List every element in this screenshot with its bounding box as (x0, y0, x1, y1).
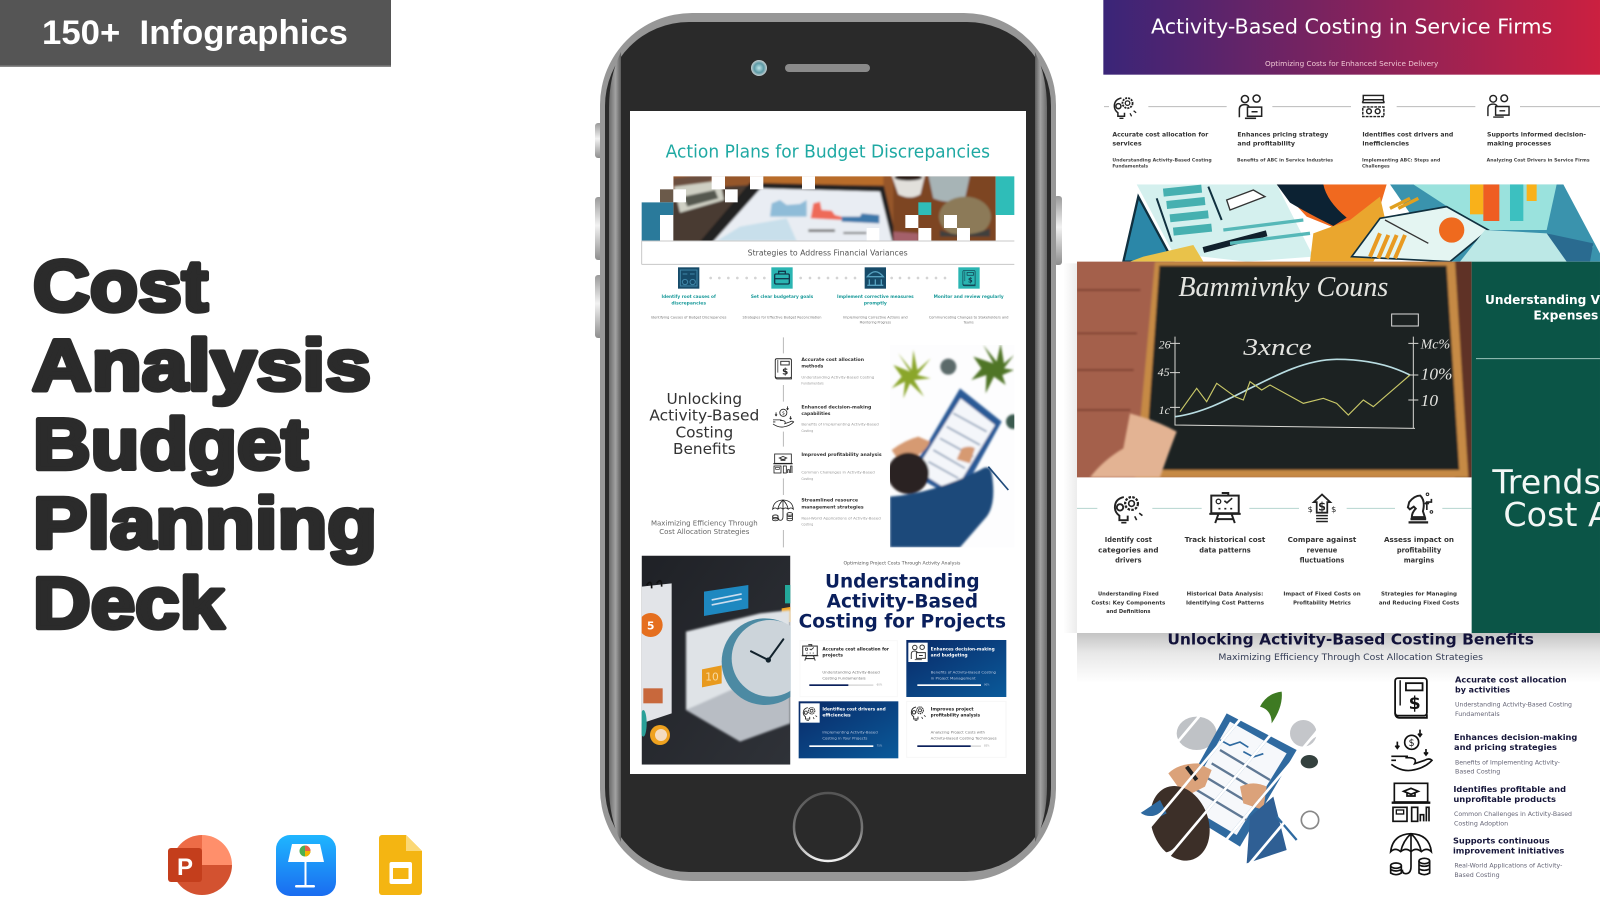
item 4: Analyzing Cost Drivers in Service Firms (1487, 157, 1590, 163)
heading: Unlocking Activity-Based Costing Benefits: Costing (675, 424, 733, 442)
slide: Activity-Based Costing in Service Firms (1103, 0, 1600, 262)
man (888, 453, 993, 547)
heading: Unlocking Activity-Based Costing Benefits: Activity-Based (649, 407, 759, 425)
benefit 3: Improved profitability analysis (801, 452, 882, 458)
card: Enhances decision-making: in Project Management (931, 676, 976, 680)
camera (751, 60, 767, 76)
header band (1103, 0, 1600, 75)
subtitle strip (642, 241, 1014, 264)
orange tag and coin (650, 665, 722, 745)
chalk writing: 45 (1158, 365, 1170, 379)
chalk writing: Mc% (1420, 337, 1450, 352)
column: compare against revenue: Impact of Fixed Costs on (1283, 592, 1361, 598)
photo: man reviewing clipboard with plants (888, 343, 1021, 547)
benefit 2: Costing (801, 429, 813, 433)
item 1 (1112, 98, 1212, 170)
icon: Google Slides (379, 835, 422, 895)
title: Cost Analysis Budget Planning Deck: Analysis (32, 326, 371, 406)
slide title: Action Plans: Action Plans for Budget Discrepancies (666, 141, 990, 162)
heading: Understanding Activity-Based Costing for Projects: Understanding (825, 571, 980, 592)
illustration: colourful finance desk (1123, 184, 1600, 262)
timeline of four steps (651, 267, 1008, 325)
step 1 (651, 267, 727, 319)
benefit: continuous improvement (1391, 834, 1565, 879)
icon: PowerPoint: P (177, 854, 193, 881)
phone mockup (595, 13, 1062, 881)
phone side buttons (595, 123, 1062, 338)
card: Enhances decision-making: Benefits of Activity-Based Costing (931, 670, 996, 674)
step 3: Monitoring Progress (860, 321, 891, 325)
benefit 4: Real-World Applications of Activity-Based (801, 516, 881, 520)
benefit: identifies profitable products: Costing Adoption (1454, 820, 1508, 827)
benefit: continuous improvement: Supports continuous (1453, 837, 1550, 846)
chalk writing: 26 (1159, 338, 1171, 352)
column: compare against revenue: revenue (1307, 546, 1338, 554)
slide: Unlocking Activity-Based Costing Benefits: Maximizing Efficiency Through Cost Allocation Strategies (1218, 653, 1483, 663)
card: Identifies cost drivers (799, 701, 898, 758)
card: Identifies cost drivers: Identifies cost drivers and (822, 707, 886, 713)
item 1: Fundamentals (1112, 164, 1148, 170)
message tag (704, 585, 792, 623)
diagonal striped photo: hands on clipboard (1140, 713, 1320, 864)
card: Identifies cost drivers: efficiencies (822, 713, 851, 719)
benefit: continuous improvement: Real-World Applications of Activity- (1454, 863, 1562, 870)
benefit: identifies profitable products: Common Challenges in Activity-Based (1454, 811, 1572, 818)
benefit: accurate cost allocation: Accurate cost allocation (1455, 675, 1567, 684)
card: Accurate cost allocation: Costing Fundamentals (822, 676, 866, 680)
card: Accurate cost allocation: Accurate cost allocation for (822, 646, 890, 652)
column: assess impact on margins: Assess impact on (1384, 536, 1454, 544)
green side panel: Understanding V (1485, 293, 1600, 307)
benefit 4: Streamlined resource (801, 498, 858, 504)
item 2 (1237, 95, 1333, 163)
subheading: Maximizing Efficiency: Maximizing Efficiency Through (651, 520, 758, 528)
chalk writing: Bammivnky Couns (1178, 272, 1388, 303)
phone body (600, 13, 1056, 881)
item 3 (1362, 95, 1453, 170)
right-side slide previews (1063, 0, 1600, 890)
eyebrow: Optimizing Project Costs: Optimizing Project Costs Through Activity Analysis (843, 561, 961, 567)
column: identify cost categories: drivers (1115, 557, 1142, 565)
column: compare against revenue: fluctuations (1300, 557, 1344, 565)
step 2: Strategies for Effective Budget Reconciliation (742, 315, 821, 319)
calendar (639, 581, 672, 737)
column: assess impact on margins: profitability (1397, 546, 1442, 554)
step 4: Monitor and review regularly (934, 294, 1004, 300)
green side panel: Trends (1491, 462, 1600, 501)
item 4: making processes (1487, 140, 1551, 147)
clipboard (918, 387, 1003, 490)
heading: Understanding Activity-Based Costing for Projects: Activity-Based (827, 591, 978, 612)
chalk writing: 3xnce (1242, 334, 1312, 361)
step 3: Implementing Corrective Actions and (843, 315, 908, 319)
title: Cost Analysis Budget Planning Deck (32, 247, 377, 644)
card: Enhances decision-making (906, 640, 1006, 697)
benefit: accurate cost allocation: Fundamentals (1455, 711, 1500, 718)
column: identify cost categories: Understanding Fixed (1098, 592, 1159, 598)
plants (892, 343, 1021, 429)
green side panel (1472, 262, 1600, 633)
card: Identifies cost drivers: Costing in Your Projects (822, 736, 868, 740)
timeline dots (709, 277, 946, 279)
card: Improves project profitability: 85% (984, 743, 990, 747)
benefit 2 (773, 404, 879, 433)
item 2: Enhances pricing strategy (1237, 131, 1329, 138)
step 2 (742, 267, 821, 319)
icon: Keynote (276, 835, 336, 896)
photo: isometric clock and calendar (642, 556, 790, 765)
column: track historical cost: Identifying Cost Patterns (1186, 600, 1264, 606)
header band: Optimizing Costs for Enhanced Service Delivery (1265, 60, 1438, 68)
item 1: Understanding Activity-Based Costing (1112, 157, 1212, 163)
card: Improves project profitability: Activity-Based Costing Techniques (931, 736, 997, 740)
benefit: accurate cost allocation: Understanding Activity-Based Costing (1455, 702, 1572, 709)
shadow left of chalkboard slide (1063, 263, 1077, 633)
icon: PowerPoint (168, 835, 232, 895)
header band: Activity-Based Costing in Service Firms (1151, 14, 1552, 38)
chalk axes (1170, 337, 1418, 428)
green side panel: Expenses (1533, 308, 1598, 322)
column: assess impact on margins: Strategies for Managing (1381, 592, 1457, 598)
step 3: Implement corrective measures (837, 294, 914, 300)
wall and frame (1070, 257, 1477, 483)
benefit 1: Fundamentals (801, 382, 824, 386)
column: identify cost categories: Identify cost (1105, 536, 1153, 544)
benefit: identifies profitable products (1392, 783, 1572, 827)
chalk writing: 1c (1159, 403, 1171, 417)
column: track historical cost: data patterns (1199, 546, 1251, 554)
slide: Unlocking Activity-Based Costing Benefits: Unlocking Activity-Based Costing Benefits (1167, 630, 1534, 648)
chalk jagged line (1180, 375, 1410, 415)
benefit 2: capabilities (801, 411, 831, 417)
heading: Unlocking Activity-Based Costing Benefits: Unlocking (667, 390, 742, 408)
benefit 1: Understanding Activity-Based Costing (801, 375, 874, 379)
item 2: and profitability (1237, 140, 1296, 147)
chalk writing: 10 (1421, 391, 1438, 410)
card: Accurate cost allocation: 60% (877, 682, 883, 686)
subheading: Maximizing Efficiency: Cost Allocation Strategies (659, 528, 750, 536)
benefit 3: Common Challenges in Activity-Based (801, 471, 875, 475)
benefit 2: Enhanced decision-making (801, 404, 871, 410)
title: Cost Analysis Budget Planning Deck: Deck (33, 564, 225, 644)
card: Accurate cost allocation (800, 641, 897, 697)
step 4 (929, 267, 1008, 325)
step 4: Teams (963, 321, 974, 325)
item 1: Accurate cost allocation for (1112, 131, 1209, 138)
column: identify cost categories (1091, 497, 1165, 615)
benefit: enhances decision-making: and pricing strategies (1454, 743, 1557, 752)
title: Cost Analysis Budget Planning Deck: Planning (33, 484, 377, 564)
speaker (785, 64, 870, 72)
benefit 1: Accurate cost allocation (801, 357, 864, 363)
item 3: inefficiencies (1362, 140, 1409, 147)
hands (890, 436, 932, 458)
card: Enhances decision-making: 90% (984, 682, 990, 686)
benefit: identifies profitable products: Identifies profitable and (1453, 785, 1566, 794)
step 1: discrepancies (671, 300, 706, 306)
column: identify cost categories: categories and (1098, 546, 1159, 554)
phone screen (630, 111, 1026, 774)
heading: Unlocking Activity-Based Costing Benefits: Benefits (673, 440, 736, 458)
benefit 1: methods (801, 364, 824, 370)
column: assess impact on margins (1379, 493, 1459, 606)
card: Improves project profitability: Analyzing Project Costs with (931, 730, 985, 734)
item 1: services (1112, 140, 1142, 147)
title: Cost Analysis Budget Planning Deck: Cost (33, 247, 208, 327)
chalk sign (1392, 314, 1418, 326)
benefit 4: Costing (801, 523, 813, 527)
benefit: continuous improvement: Based Costing (1454, 872, 1500, 879)
card: Accurate cost allocation: Understanding Activity-Based (822, 670, 880, 674)
photo banner: tablet on desk (642, 173, 1014, 243)
subtitle strip: Strategies to Address Financial Variances (748, 249, 908, 258)
vertical benefit list (773, 337, 882, 547)
benefit 3: Costing (801, 477, 813, 481)
hand (1090, 413, 1177, 477)
slide: Fixed cost analysis with chalkboard photo (1070, 257, 1600, 633)
column: assess impact on margins: margins (1404, 557, 1434, 565)
leaf (1260, 692, 1282, 723)
column: track historical cost (1185, 493, 1266, 606)
phone screen content (639, 141, 1021, 765)
benefit: enhances decision-making (1391, 730, 1578, 776)
step 3 (837, 267, 914, 325)
column: assess impact on margins: and Reducing Fixed Costs (1379, 600, 1459, 606)
shadow below chalkboard slide (1077, 633, 1600, 683)
item 3: Implementing ABC: Steps and (1362, 157, 1440, 163)
step 3: promptly (864, 300, 887, 306)
card: Enhances decision-making: and budgeting (931, 653, 968, 659)
item 4: Supports informed decision- (1487, 131, 1586, 138)
benefit: enhances decision-making: Based Costing (1455, 769, 1500, 776)
heading: Understanding Activity-Based Costing for Projects (799, 571, 1006, 633)
column: track historical cost: Historical Data Analysis: (1187, 592, 1263, 598)
badge: 150+ Infographics (0, 0, 391, 67)
card: Identifies cost drivers: Implementing Activity-Based (822, 730, 878, 734)
chalk curve (1175, 359, 1410, 417)
item 2: Benefits of ABC in Service Industries (1237, 157, 1333, 163)
subheading: Maximizing Efficiency (651, 520, 758, 536)
item 4 (1487, 95, 1590, 163)
card: Improves project profitability (907, 701, 1006, 757)
column: compare against revenue (1283, 495, 1361, 606)
chalk writing: 10% (1421, 364, 1452, 383)
benefit 4 (773, 498, 881, 527)
column: compare against revenue: Profitability Metrics (1293, 600, 1351, 606)
step 1: Identifying Causes of Budget Discrepancies (651, 315, 727, 319)
step 4: Communicating Changes to Stakeholders and (929, 315, 1008, 319)
home button (794, 793, 862, 861)
benefit: accurate cost allocation: by activities (1455, 685, 1510, 694)
card: Improves project profitability: Improves project (931, 707, 974, 713)
benefit: enhances decision-making: Enhances decision-making (1454, 733, 1578, 742)
step 1: Identify root causes of (661, 294, 716, 300)
desk photo (673, 176, 996, 240)
chalk writing (1158, 272, 1452, 417)
card: Accurate cost allocation: projects (822, 653, 843, 659)
benefit: identifies profitable products: unprofitable products (1453, 795, 1556, 804)
column: identify cost categories: Costs: Key Components (1091, 600, 1165, 606)
title: Cost Analysis Budget Planning Deck: Budget (33, 405, 308, 485)
card: Identifies cost drivers: 75% (877, 743, 883, 747)
card: Enhances decision-making: Enhances decision-making (931, 646, 995, 652)
benefit 3 (773, 452, 882, 481)
step 2: Set clear budgetary goals (751, 294, 813, 300)
clock (722, 618, 790, 705)
column: track historical cost: Track historical cost (1185, 536, 1266, 544)
laptop and papers (686, 610, 790, 742)
badge: 150+ Infographics: 150+ Infographics (42, 14, 348, 52)
card: Improves project profitability: profitability analysis (931, 713, 980, 719)
calendar: 5 (647, 619, 654, 632)
column: identify cost categories: and Definitions (1106, 609, 1150, 615)
item 3: Identifies cost drivers and (1362, 131, 1453, 138)
benefit 2: Benefits of Implementing Activity-Based (801, 423, 879, 427)
item 3: Challenges (1362, 164, 1390, 170)
benefit: enhances decision-making: Benefits of Implementing Activity- (1455, 759, 1560, 766)
orange tag and coin: 10 (705, 671, 719, 684)
slide: Unlocking Activity-Based Costing Benefits (1120, 630, 1578, 890)
benefit 1 (775, 357, 874, 386)
heading: Unlocking Activity-Based Costing Benefits (649, 390, 759, 458)
benefit 4: management strategies (801, 504, 864, 510)
benefit: accurate cost allocation (1395, 675, 1572, 718)
benefit: continuous improvement: improvement initiatives (1453, 847, 1565, 856)
photo: chalkboard with chart (1070, 257, 1477, 483)
heading: Understanding Activity-Based Costing for Projects: Costing for Projects (799, 612, 1006, 633)
column: compare against revenue: Compare against (1288, 536, 1357, 544)
